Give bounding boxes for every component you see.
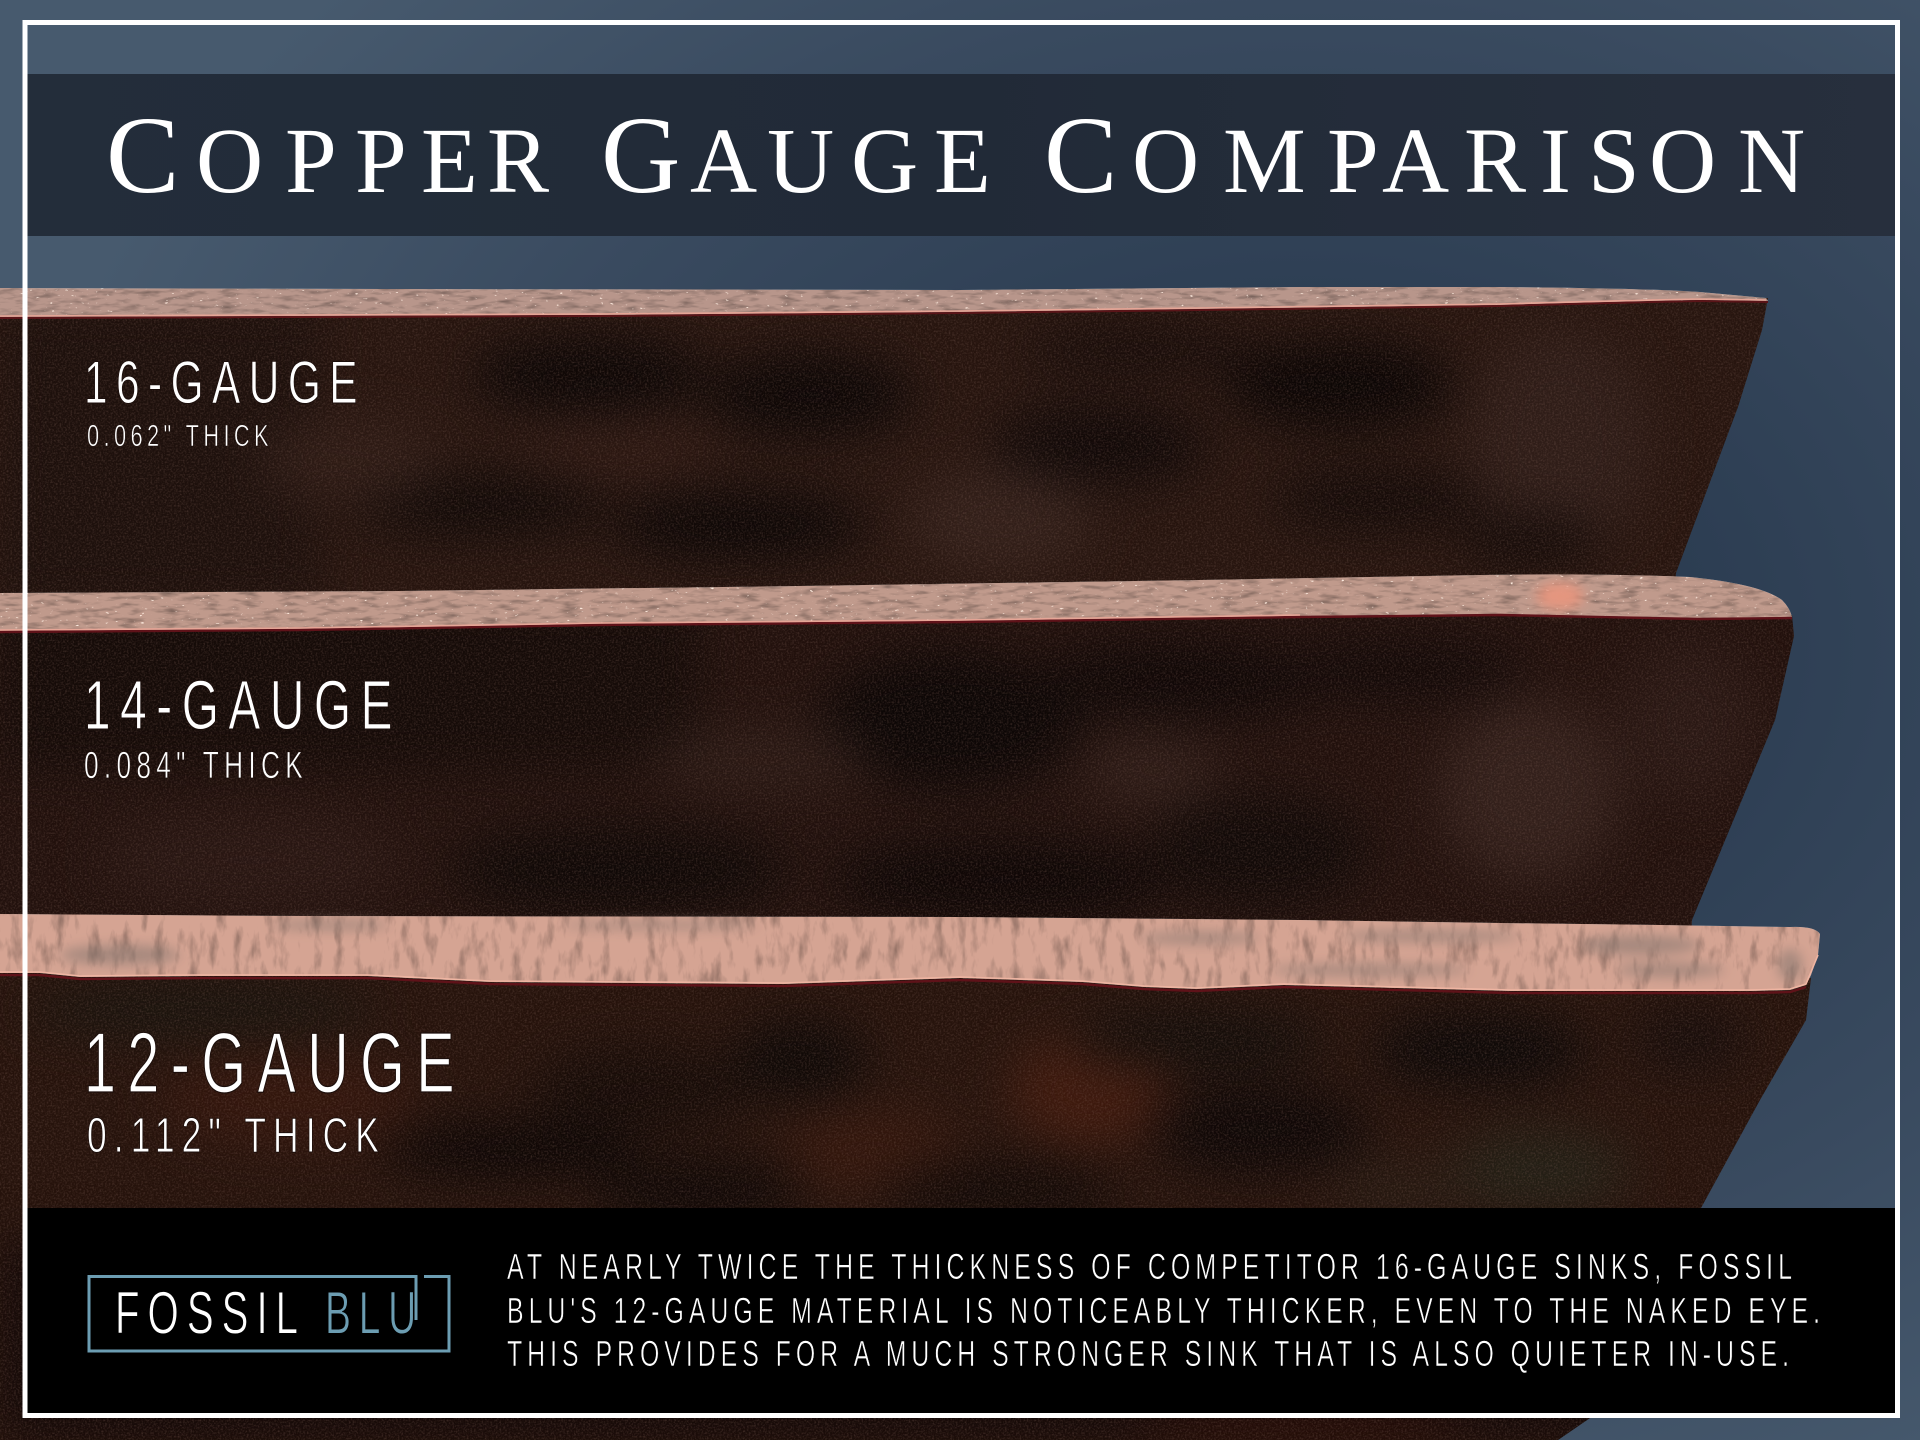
title: Copper Gauge Comparison: G bbox=[601, 94, 680, 216]
sink: 14-gauge copper bbox=[0, 574, 1794, 950]
16-gauge label bbox=[84, 349, 366, 453]
12-gauge thickness: 0.112" THICK bbox=[87, 1109, 386, 1163]
logo accent word: BLU bbox=[325, 1280, 424, 1346]
footer description bbox=[507, 1246, 1825, 1374]
title: Copper Gauge Comparison: C bbox=[106, 94, 179, 216]
16-gauge rim edge bbox=[0, 287, 1768, 318]
title: Copper Gauge Comparison: OMPARISON bbox=[1132, 110, 1805, 213]
14-gauge label bbox=[84, 666, 402, 787]
title: Copper Gauge Comparison bbox=[106, 94, 1805, 216]
title: Copper Gauge Comparison: C bbox=[1044, 94, 1117, 216]
title: Copper Gauge Comparison: AUGE bbox=[690, 110, 991, 213]
12-gauge rim edge bbox=[0, 914, 1820, 993]
sink: 12-gauge copper bbox=[0, 914, 1820, 1440]
12-gauge label bbox=[84, 1016, 466, 1163]
logo: Fossil Blu bbox=[89, 1276, 449, 1351]
logo wordmark: FOSSIL bbox=[115, 1280, 306, 1346]
sink: 16-gauge copper bbox=[0, 287, 1768, 610]
16-gauge body bbox=[0, 298, 1768, 610]
title band bbox=[27, 74, 1895, 236]
12-gauge label: 12-GAUGE bbox=[84, 1016, 466, 1111]
16-gauge label: 16-GAUGE bbox=[84, 349, 366, 416]
title: Copper Gauge Comparison: OPPER bbox=[196, 110, 549, 213]
footer panel bbox=[27, 1208, 1895, 1413]
14-gauge body bbox=[0, 615, 1794, 926]
14-gauge rim edge bbox=[0, 574, 1792, 632]
12-gauge body bbox=[0, 968, 1811, 1440]
14-gauge label: 14-GAUGE bbox=[84, 666, 402, 744]
logo frame bbox=[89, 1276, 449, 1351]
14-gauge thickness: 0.084" THICK bbox=[84, 745, 308, 787]
16-gauge thickness: 0.062" THICK bbox=[87, 419, 273, 453]
